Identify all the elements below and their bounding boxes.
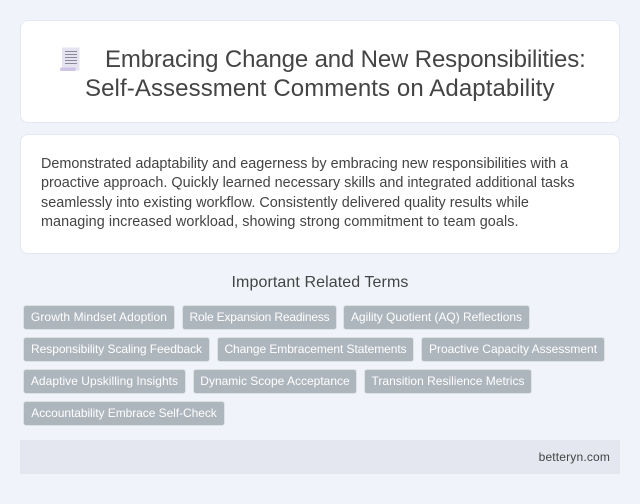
tag list: Role Expansion Readiness [189, 310, 330, 324]
title line 2: Self-Assessment Comments on Adaptability [85, 75, 555, 102]
panel: description card [20, 134, 620, 254]
tag list: Change Embracement Statements [224, 342, 407, 356]
tag list: Growth Mindset Adoption [31, 310, 167, 324]
tag list: Accountability Embrace Self-Check [31, 406, 217, 420]
tag list [23, 305, 605, 426]
icon: document scroll [60, 48, 80, 71]
tag list: Agility Quotient (AQ) Reflections [351, 310, 522, 324]
footer bar [20, 440, 620, 474]
tag list: Adaptive Upskilling Insights [31, 374, 178, 388]
heading: important related terms: Important Related Terms [232, 274, 408, 291]
tag list: Transition Resilience Metrics [372, 374, 524, 388]
footer source: betteryn.com [539, 450, 610, 464]
description text: proactive approach. Quickly learned necessary skills and integrated additional tasks [41, 175, 575, 191]
panel: title card [20, 20, 620, 123]
tag list: Dynamic Scope Acceptance [200, 374, 350, 388]
description text: Demonstrated adaptability and eagerness by embracing new responsibilities with a [41, 156, 568, 172]
description text: seamlessly into existing workflow. Consistently delivered quality results while [41, 195, 529, 211]
title line 1: Embracing Change and New Responsibilities: [105, 46, 586, 73]
description text: managing increased workload, showing strong commitment to team goals. [41, 214, 519, 230]
tag list: Responsibility Scaling Feedback [31, 342, 202, 356]
tag list: Proactive Capacity Assessment [429, 342, 597, 356]
description text [41, 156, 575, 230]
